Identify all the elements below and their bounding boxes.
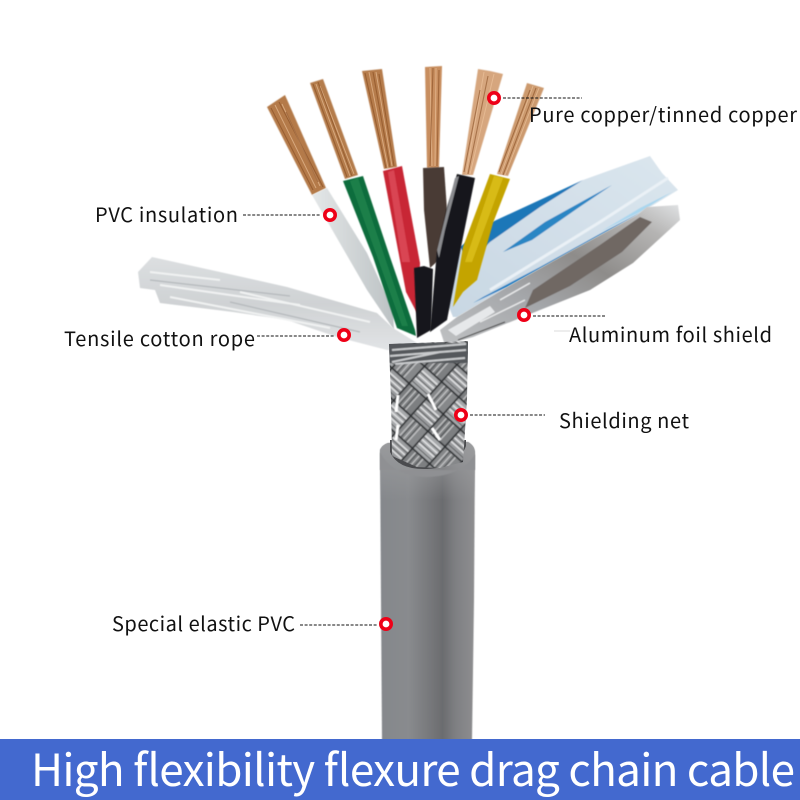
copper conductor 4: [425, 66, 442, 168]
cable illustration: [138, 66, 680, 740]
callout: tensile cotton rope: [64, 323, 349, 352]
callout: PVC insulation: PVC insulation: [95, 199, 238, 228]
shielding net braid: [389, 341, 468, 468]
callout: aluminum foil shield: Aluminum foil shield: [569, 319, 772, 348]
short black filler core: [414, 266, 433, 338]
yellow insulated core: [453, 174, 510, 307]
black insulated core: [430, 174, 475, 332]
callout: special elastic PVC: Special elastic PVC: [112, 608, 295, 637]
copper conductor 6: [497, 83, 544, 176]
green insulated core: [343, 176, 416, 336]
copper conductor 2: [310, 79, 358, 179]
title banner: High flexibility flexure drag chain cable: [31, 735, 795, 799]
brown insulated core: [423, 167, 447, 268]
callout: special elastic PVC: [112, 608, 391, 637]
tensile cotton rope: [138, 257, 417, 351]
white insulated core: [312, 188, 394, 330]
callout: shielding net: [456, 405, 689, 434]
callout: PVC insulation: [95, 199, 335, 228]
red insulated core: [383, 166, 420, 315]
aluminum foil shield strip: [440, 205, 680, 345]
callout: copper conductor: Pure copper/tinned copper: [529, 99, 797, 128]
callout: aluminum foil shield: [519, 310, 772, 348]
copper conductor 5: [462, 69, 503, 175]
gray elastic PVC jacket: [380, 440, 475, 740]
blue and white wrapping tape: [446, 156, 678, 317]
callout: shielding net: Shielding net: [559, 405, 689, 434]
jacket front ring: [380, 452, 475, 477]
copper conductor 3: [362, 69, 397, 169]
callout: tensile cotton rope: Tensile cotton rope: [64, 323, 255, 352]
copper conductor 1: [267, 95, 326, 195]
